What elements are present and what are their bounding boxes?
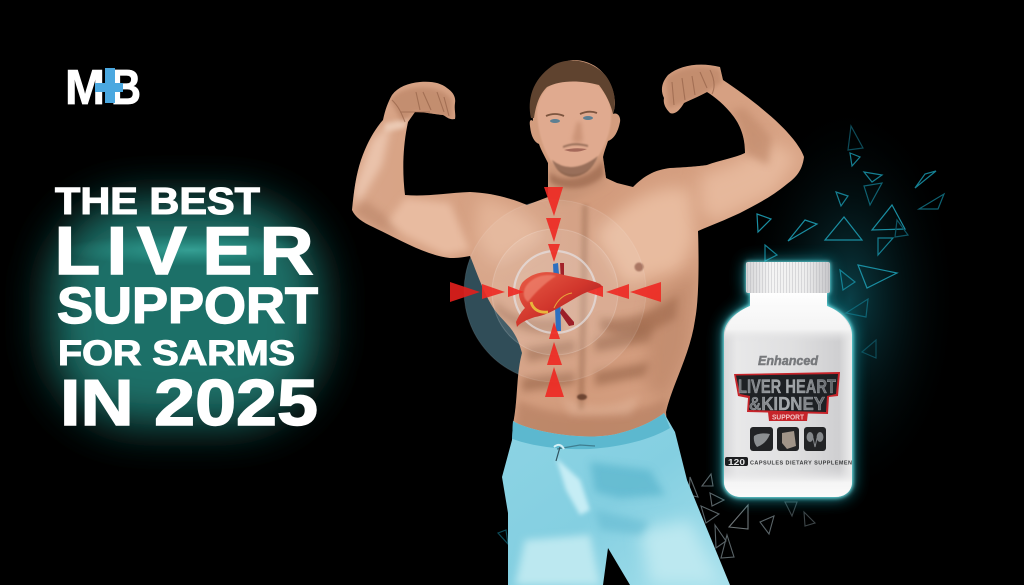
- bottle shoulder: [724, 290, 852, 342]
- support tag: SUPPORT: [772, 414, 805, 422]
- arrows from left: [450, 282, 524, 302]
- arrows from bottom: [545, 322, 564, 397]
- bottle base: [724, 468, 852, 497]
- hair: [530, 61, 615, 118]
- dietary line: CAPSULES DIETARY SUPPLEMEN: [750, 460, 852, 466]
- brand name: Enhanced: [758, 353, 819, 368]
- outer ring backing on black: [464, 200, 646, 382]
- capsule count: [725, 457, 748, 467]
- icon: liver: [750, 427, 773, 451]
- target rings: [464, 200, 646, 382]
- title line: the best: THE BEST: [55, 181, 260, 223]
- man: fist left: [392, 92, 449, 122]
- man: shorts: [502, 413, 730, 585]
- man: fist right: [672, 70, 714, 105]
- bottle wide glow: [723, 262, 853, 498]
- outer ring: [464, 200, 646, 382]
- icon: heart: [777, 427, 799, 451]
- particles: upper right triangles: [498, 126, 944, 544]
- liver highlight: [524, 275, 556, 302]
- man: face: [530, 61, 615, 177]
- artery bottom: [560, 308, 574, 326]
- face skin: [537, 78, 611, 174]
- text glow: [50, 200, 320, 425]
- particles: lower grey triangles: [689, 474, 815, 558]
- title line: support: SUPPORT: [57, 277, 318, 334]
- arrows from right: [587, 282, 661, 302]
- inner ring: [514, 251, 596, 333]
- title: [54, 181, 318, 439]
- man: navel: [577, 394, 587, 400]
- man: nipple: [634, 262, 644, 272]
- liver lobe: [516, 272, 603, 327]
- support tag: [768, 412, 808, 422]
- vena cava: [553, 263, 561, 331]
- logo letter B: B: [111, 61, 141, 115]
- man: shorts shading: [510, 413, 722, 585]
- capsule count: 120: [728, 457, 745, 467]
- logo plus: [95, 68, 123, 103]
- supplement bottle: [723, 262, 853, 498]
- product name: [734, 372, 840, 414]
- gall bladder: [531, 302, 548, 312]
- product name line 1: LIVER HEART: [738, 377, 836, 398]
- title line: for sarms: FOR SARMS: [58, 334, 295, 373]
- icon: kidneys: [804, 427, 826, 451]
- middle ring: [492, 229, 618, 355]
- liver: [516, 263, 603, 331]
- nose: [572, 122, 583, 143]
- logo letter M: M: [65, 61, 105, 115]
- man: skin silhouette: [352, 60, 804, 445]
- man: [352, 60, 804, 585]
- bottle cap: [746, 262, 830, 293]
- bottle side glow: [740, 100, 960, 500]
- arrows from top: [544, 187, 563, 262]
- bottle outline glow: [723, 262, 853, 498]
- logo: M+B: [65, 61, 141, 115]
- mouth: [564, 148, 587, 152]
- organ icons: [750, 427, 826, 451]
- eyes: [546, 112, 597, 123]
- man: muscle shading: [352, 67, 798, 445]
- title line: liver: LIVER: [54, 213, 314, 289]
- title line: in 2025: IN 2025: [60, 366, 318, 439]
- artery top: [560, 263, 564, 283]
- bottle body: [724, 290, 852, 497]
- stubble: [552, 143, 598, 177]
- product name line 2: &KIDNEY: [749, 394, 825, 414]
- red arrows pointing to liver: [450, 187, 661, 397]
